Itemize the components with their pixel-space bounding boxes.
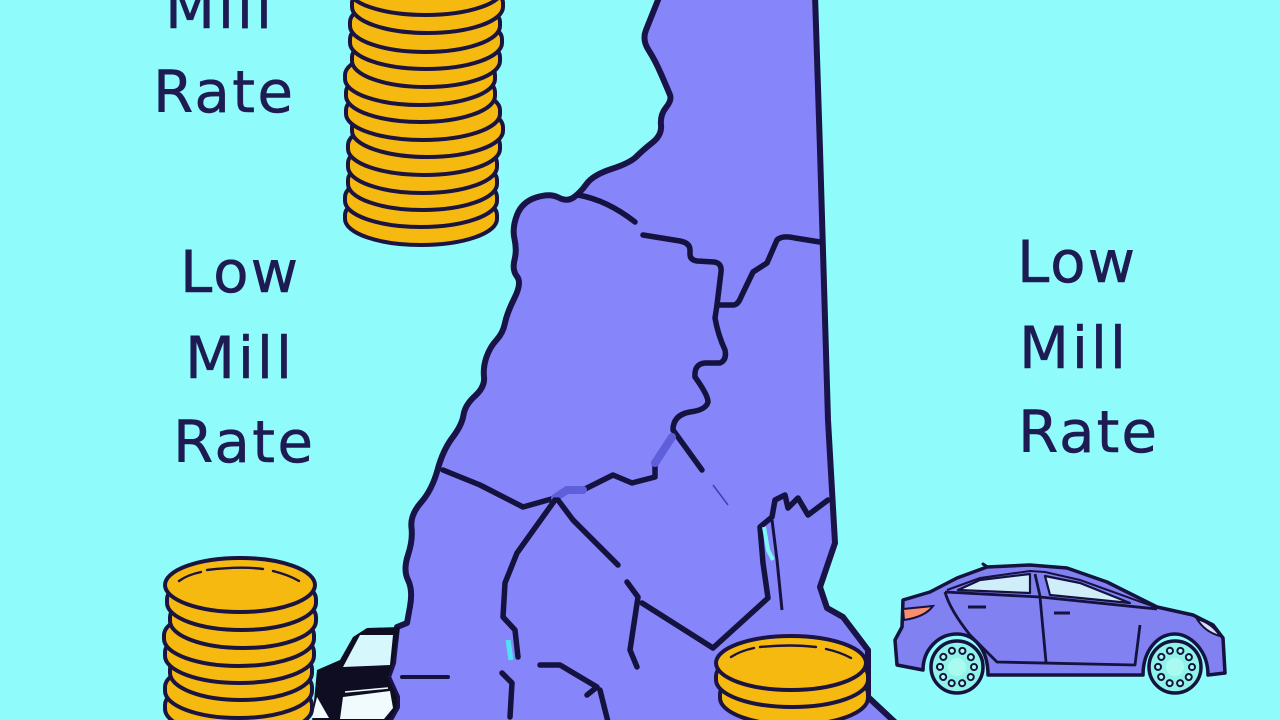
rear window [958, 574, 1030, 593]
coin top highlights: centre stack [731, 646, 851, 658]
car body [312, 627, 400, 720]
trim line [345, 688, 388, 692]
front panel [340, 691, 393, 719]
coin stack: bottom left [164, 558, 316, 720]
text: Low Mill Rate right: Rate [1018, 398, 1157, 466]
coin stack: bottom centre [716, 636, 868, 720]
county border: north [578, 195, 725, 470]
text: Mill Rate top left: Rate [153, 58, 293, 126]
text: Low Mill Rate left: Mill [185, 324, 292, 392]
county border: north east branch [717, 237, 820, 305]
river highlight [764, 527, 773, 560]
coin top highlights: left stack [179, 568, 299, 581]
car body [895, 565, 1225, 675]
county border: central join [555, 437, 672, 498]
text: Low Mill Rate right: Mill [1019, 314, 1126, 382]
lake highlight [508, 640, 511, 660]
river strand [772, 520, 782, 610]
door handles [968, 607, 1070, 613]
text: Low Mill Rate right: Low [1017, 228, 1135, 296]
county border: lower [540, 665, 608, 720]
county border: south west [502, 500, 555, 717]
text: Low Mill Rate left: Low [180, 238, 298, 306]
roof strip [947, 571, 1155, 607]
wheel rear [931, 641, 983, 693]
text: Mill Rate top left [153, 0, 293, 126]
map: New Hampshire counties [387, 0, 898, 720]
antenna [983, 564, 989, 568]
wheel front [1149, 641, 1201, 693]
text: Low Mill Rate left: Rate [173, 408, 313, 476]
tail light [903, 606, 933, 620]
car: purple sedan at right [895, 564, 1225, 693]
faint border mark [713, 485, 728, 505]
coin stack: top [345, 0, 503, 245]
headlight [312, 697, 329, 718]
front window [1045, 576, 1130, 603]
text: Low Mill Rate right [1017, 228, 1157, 466]
state outline [387, 0, 898, 720]
county border: south central [558, 500, 638, 667]
door lines [945, 574, 1157, 665]
car: partial black car at left [312, 627, 400, 720]
windshield [343, 635, 393, 667]
small road mark [402, 675, 448, 679]
headlight [1197, 619, 1220, 636]
county border: south east [642, 495, 828, 648]
text: Low Mill Rate left [173, 238, 313, 476]
county border: central [443, 463, 655, 507]
